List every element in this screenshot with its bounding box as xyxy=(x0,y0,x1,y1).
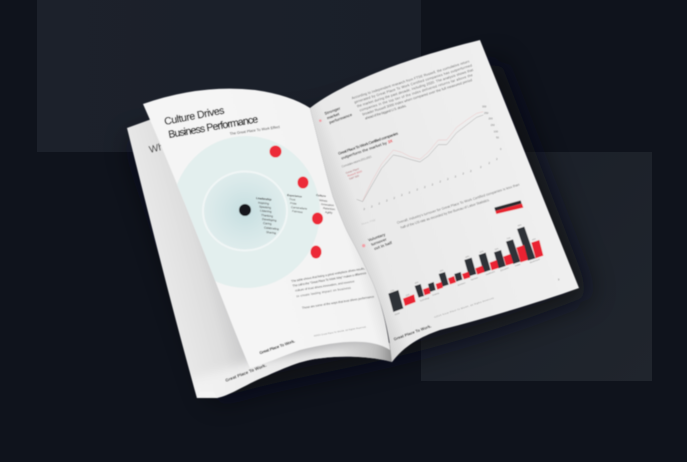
chart right axis labels: 0 xyxy=(500,147,502,151)
section label: voluntary turnover: Voluntary xyxy=(367,231,387,243)
chart right axis labels: 250 xyxy=(484,111,489,115)
paragraph: job growth: half of the US rate as recorded by the Bureau of Labor Statistics. xyxy=(400,198,490,230)
bar category labels: Education xyxy=(500,266,509,272)
intro paragraph: companies in the top tier of the index delivered returns far above the xyxy=(359,73,473,112)
bar value labels xyxy=(390,224,537,297)
bar value labels: 62% xyxy=(480,251,484,254)
list: outcomes: Values xyxy=(319,198,328,203)
page stack behind the left page xyxy=(127,116,400,410)
intro paragraph xyxy=(351,59,478,123)
center dot xyxy=(239,204,251,216)
chart legend xyxy=(345,166,364,181)
bar value labels: 48% xyxy=(532,238,537,242)
left page paragraph: to create lasting impact on business xyxy=(296,286,352,298)
footnote: Source: FTSE xyxy=(361,219,376,226)
right page footer logo: Great Place To Work. xyxy=(393,323,432,342)
section label: stronger returns: performance xyxy=(328,112,353,125)
right page xyxy=(310,40,579,362)
chart x axis labels: 2 xyxy=(416,188,418,192)
intro paragraph: broader Russell 3000 Index when compared over the full measured period xyxy=(362,78,473,116)
list: employees xyxy=(287,193,308,214)
back page heading: Why xyxy=(148,140,170,156)
red outcome markers xyxy=(270,146,323,258)
paragraph: job growth: Overall, industry's turnover for Great Place To Work Certified companies is less than xyxy=(396,183,520,225)
inner disc xyxy=(203,172,287,250)
section label: stronger returns xyxy=(324,102,353,125)
title: Culture Drives xyxy=(163,106,225,128)
bar value labels: 45% xyxy=(440,270,444,273)
list: outcomes: Innovation xyxy=(321,202,335,207)
panel: top-left background block xyxy=(37,0,421,152)
left page xyxy=(143,89,390,368)
bullet: voluntary turnover xyxy=(362,244,365,247)
bar category labels: Healthcare xyxy=(485,270,496,276)
chart subtitle: Cumulative returns 2011-2021 xyxy=(341,154,373,169)
left page footer logo: Great Place To Work. xyxy=(259,338,296,355)
chart x axis labels: 2 xyxy=(371,204,373,208)
bar value labels: 55% xyxy=(495,248,499,251)
bar category labels: Technology xyxy=(420,297,430,303)
chart title: outperform the market by 3X xyxy=(340,138,394,161)
title: Business Performance xyxy=(168,114,259,141)
lower stack edge xyxy=(192,342,392,398)
chart right axis labels: 100 xyxy=(494,130,499,134)
chart legend: Great Place xyxy=(345,166,360,175)
leadership list: Caring xyxy=(263,221,272,226)
chart x axis labels: 2 xyxy=(401,193,403,197)
list: outcomes: Retention xyxy=(323,206,336,211)
bar value labels: 60% xyxy=(465,256,470,259)
list: outcomes: Culture xyxy=(316,193,326,198)
list: employees: Experience xyxy=(287,193,303,199)
bar value labels: 57% xyxy=(390,290,395,293)
chart x axis labels: 2 xyxy=(470,169,472,173)
list: employees: Camaraderie xyxy=(291,205,308,211)
chart x axis labels: 2 xyxy=(424,185,426,189)
leadership list: Inspiring xyxy=(258,201,270,206)
chart x axis labels: 2 xyxy=(393,196,395,200)
bar category labels: Retail xyxy=(394,312,401,316)
bar value labels: 25% xyxy=(406,294,410,297)
chart x axis labels: 2 xyxy=(409,190,411,194)
bar value labels: 40% xyxy=(415,282,419,285)
bars: dark series xyxy=(388,227,535,312)
leadership list: Sharing xyxy=(266,230,277,235)
chart x axis labels: 2 xyxy=(480,165,482,169)
chart x axis labels: 2 xyxy=(432,182,434,186)
back page footer: Great Place To Work. xyxy=(225,363,267,383)
leadership list: Thanking xyxy=(261,213,274,218)
right page bottom section in zoom coordinates xyxy=(362,183,560,342)
left page paragraph: culture of trust drives innovation, and revenue xyxy=(295,279,355,293)
intro paragraph: According to independent research from FTSE Russell, the cumulative return xyxy=(351,59,470,100)
leadership list: Listening xyxy=(260,209,272,214)
left page paragraph: The table shows that being a great workplace drives results, xyxy=(291,266,365,283)
intro paragraph: generated by Great Place To Work Certified companies has outperformed xyxy=(354,63,473,104)
chart right axis labels: 200 xyxy=(488,116,493,120)
outer ring xyxy=(172,136,320,288)
chart legend: S&P 500 xyxy=(348,173,360,181)
bar category labels: Restaurants xyxy=(529,258,540,264)
subtitle: The Great Place To Work Effect xyxy=(230,125,280,136)
chart right axis labels: 150 xyxy=(490,123,495,127)
chart right axis labels: 50 xyxy=(496,136,499,140)
chart right axis labels xyxy=(482,104,502,151)
bars: red series xyxy=(403,240,543,306)
chart x axis labels: 2 xyxy=(462,172,464,176)
list: outcomes xyxy=(316,193,336,215)
chart x axis labels: 2 xyxy=(378,201,380,205)
bar category labels: Hotels xyxy=(515,263,521,268)
list: employees: Fairness xyxy=(292,209,304,214)
list: employees: Pride xyxy=(290,201,297,206)
intro paragraph: the market during the past decade, including 2020. The analysis shows that xyxy=(356,68,474,108)
section label: stronger returns: Stronger xyxy=(324,105,341,116)
chart legend: Russell 3000 xyxy=(347,169,363,178)
chart x axis labels: 2 xyxy=(455,174,457,178)
leadership list: Celebrating xyxy=(264,226,279,231)
chart legend badges xyxy=(494,200,523,214)
chart x axis labels: 2 xyxy=(439,180,441,184)
bar category labels: Business xyxy=(458,282,466,287)
intro paragraph: ahead of the biggest U.S. stocks. xyxy=(364,104,407,121)
line chart xyxy=(357,112,483,202)
list: outcomes: Agility xyxy=(325,210,333,215)
chart x axis labels: 2 xyxy=(363,207,365,211)
bar chart xyxy=(388,224,543,316)
chart right axis labels: 300 xyxy=(482,104,487,108)
leadership list: Developing xyxy=(262,217,277,223)
book shadow xyxy=(130,60,590,400)
section label: stronger returns: market xyxy=(326,111,341,120)
section label: voluntary turnover: turnover xyxy=(370,236,388,247)
bullet: stronger returns xyxy=(319,119,322,122)
bar category labels xyxy=(394,258,540,316)
chart x axis labels: 2 xyxy=(496,157,498,161)
section label: voluntary turnover xyxy=(367,230,393,252)
chart x axis labels: 2 xyxy=(447,177,449,181)
left page paragraph xyxy=(259,266,375,355)
leadership list: Leadership xyxy=(256,196,272,202)
panel: right background block xyxy=(421,152,652,381)
right page footer credit: ©2024 Great Place To Work®. All Rights Reserved. xyxy=(434,296,495,319)
concentric circle diagram xyxy=(172,136,320,288)
bar category labels: Services xyxy=(470,276,478,282)
bar category labels: Finance xyxy=(432,292,440,297)
right page top section in zoom coordinates xyxy=(319,59,523,226)
left page paragraph: These are some of the ways that trust drives performance xyxy=(302,295,375,310)
left page paragraph: The call to the "Great Place To Work Way" makes a difference xyxy=(292,271,367,288)
chart x axis labels: 2 xyxy=(386,199,388,203)
chart x axis labels: 2 xyxy=(488,161,490,165)
chart x axis labels xyxy=(363,157,498,211)
bar value labels: 73% xyxy=(507,237,511,241)
stepped page corner xyxy=(197,392,217,398)
bar value labels: 96% xyxy=(518,224,522,228)
chart title: Great Place To Work Certified companies xyxy=(337,130,400,156)
open brochure xyxy=(127,40,579,410)
list: employees: Trust xyxy=(289,197,296,202)
left page footer credit: ©2024 Great Place To Work®. All Rights Reserved. xyxy=(314,325,367,338)
section label: voluntary turnover: cut in half xyxy=(373,240,393,251)
page number: 9 xyxy=(558,280,560,282)
leadership list xyxy=(256,196,279,235)
leadership list: Speaking xyxy=(259,205,272,210)
